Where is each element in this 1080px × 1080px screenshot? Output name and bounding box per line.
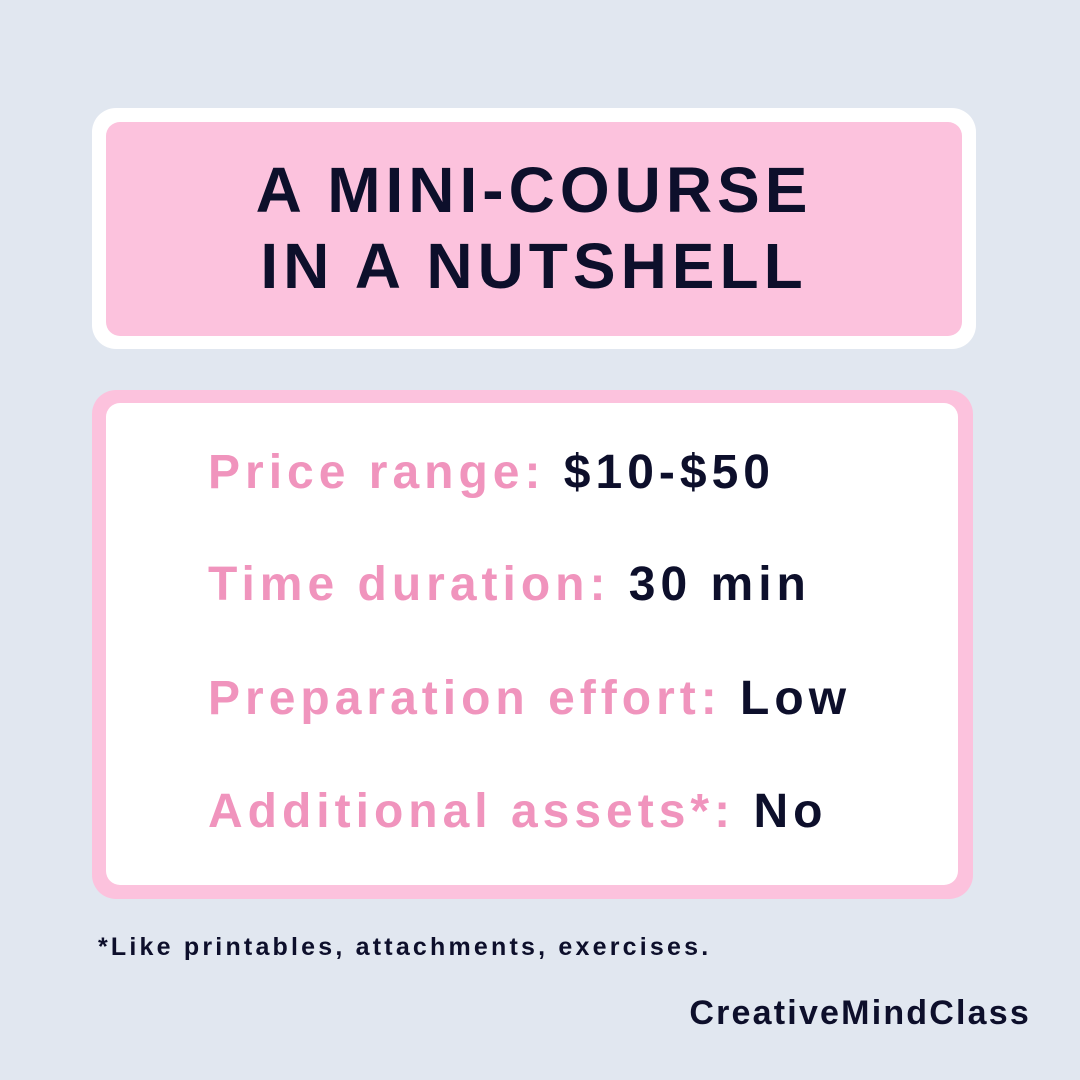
title bbox=[106, 122, 962, 336]
brand: CreativeMindClass bbox=[689, 994, 1031, 1032]
time duration: Time duration: 30 min bbox=[208, 558, 811, 611]
title: IN A NUTSHELL bbox=[260, 230, 808, 302]
title panel bbox=[92, 108, 976, 349]
title: A MINI-COURSE bbox=[256, 154, 812, 226]
footnote: *Like printables, attachments, exercises. bbox=[98, 933, 711, 961]
panel: details bbox=[92, 390, 973, 899]
price range: Price range: $10-$50 bbox=[208, 446, 775, 499]
preparation effort: Preparation effort: Low bbox=[208, 672, 851, 725]
additional assets: Additional assets*: No bbox=[208, 785, 827, 838]
